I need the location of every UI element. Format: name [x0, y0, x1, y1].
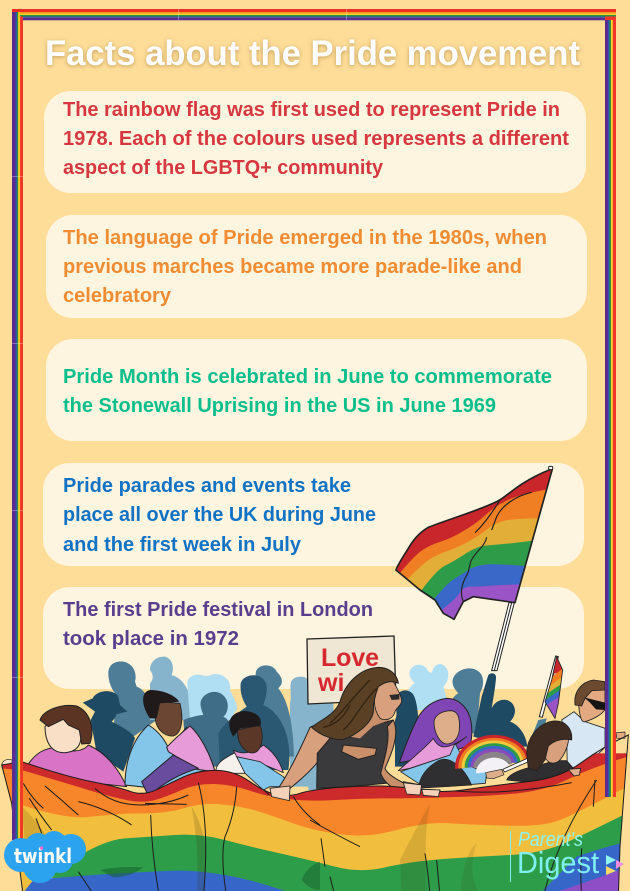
title: Facts about the Pride movement — [45, 34, 580, 73]
person: woman in black top — [312, 667, 440, 797]
panel: rainbow flag fact: The rainbow flag was first used to represent Pride in — [63, 99, 560, 121]
illustration: protest sign — [307, 636, 396, 704]
illustration: protest sign: Love — [321, 644, 379, 672]
banner fold lines — [23, 773, 597, 891]
panel: Pride Month fact: Pride Month is celebrated in June to commemorate — [63, 366, 552, 388]
logo: Parent's Digest: Digest — [517, 845, 599, 880]
illustration: marchers right group — [312, 667, 625, 797]
person: pink shirt — [2, 705, 127, 787]
panel: language of Pride fact — [46, 215, 587, 318]
panel: UK parades fact: and the first week in July — [63, 534, 302, 556]
logo: twinkl: twinkl — [14, 844, 72, 868]
logo: twinkl — [4, 831, 86, 883]
illustration: protest sign: wi — [317, 669, 344, 697]
banner shading — [23, 808, 45, 839]
panel: UK parades fact: place all over the UK during June — [63, 504, 376, 526]
panel: Pride Month fact: the Stonewall Uprising in the US in June 1969 — [63, 395, 496, 417]
panel: Pride Month fact — [46, 339, 587, 441]
hands on banner — [270, 768, 581, 801]
panel: language of Pride fact: previous marches became more parade-like and — [63, 256, 522, 278]
person: woman with dark hair — [507, 721, 581, 782]
logo: Parent's Digest: Parent's — [518, 829, 583, 851]
illustration: crowd silhouettes — [83, 657, 547, 790]
person: blue and pink cape — [216, 711, 290, 790]
panel: first London festival fact: The first Pride festival in London — [63, 599, 373, 621]
person: trans flag blanket — [125, 690, 215, 796]
arm of woman reaching to banner — [278, 725, 330, 788]
person: man in sunglasses — [562, 680, 625, 768]
light blue backdrop behind woman — [308, 703, 333, 790]
rainbow fan — [452, 731, 531, 776]
panel: rainbow flag fact — [44, 91, 586, 193]
panel: UK parades fact: Pride parades and events take — [63, 475, 351, 497]
illustration: large rainbow banner — [0, 735, 630, 891]
panel: language of Pride fact: The language of Pride emerged in the 1980s, when — [63, 227, 547, 249]
illustration: waving rainbow flag — [390, 463, 557, 671]
illustration: small handheld flag — [539, 653, 565, 720]
panel: first London festival fact — [43, 587, 584, 689]
panel: rainbow flag fact: aspect of the LGBTQ+ community — [63, 157, 384, 179]
person: purple hood — [398, 698, 487, 788]
panel: rainbow flag fact: 1978. Each of the colours used represents a different — [63, 128, 569, 150]
panel: language of Pride fact: celebratory — [63, 285, 172, 307]
panel: first London festival fact: took place in 1972 — [63, 628, 239, 650]
panel: UK parades fact — [43, 463, 584, 566]
logo: Parent's Digest — [510, 829, 624, 882]
illustration: marchers left group — [2, 690, 330, 796]
